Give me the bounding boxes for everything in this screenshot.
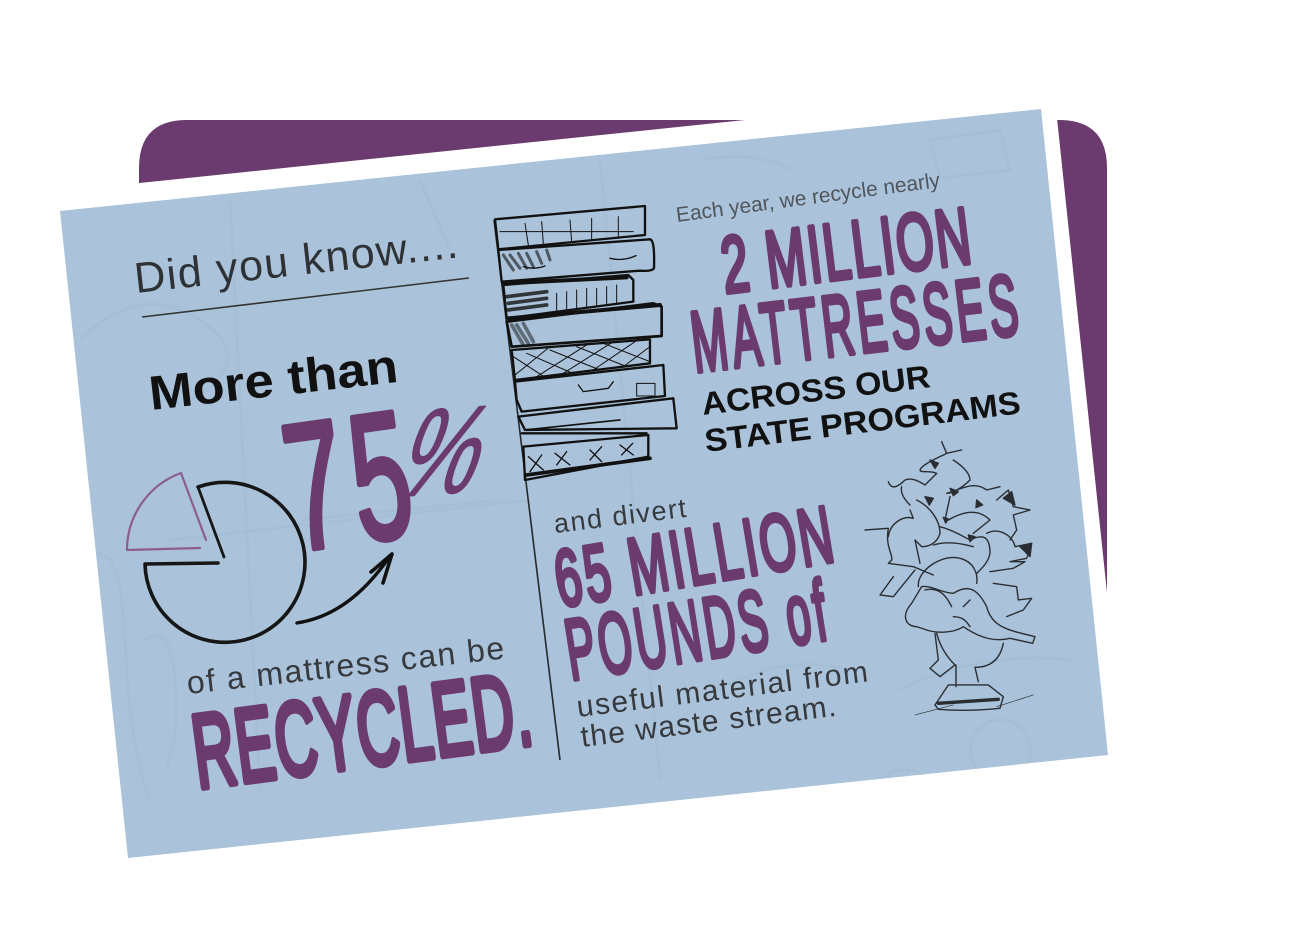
stat: 75 percent: 75 [273,374,423,590]
text: of a mattress can be: of a mattress can be [185,630,506,701]
text: useful material [575,655,870,754]
text: useful material: the waste stream. [579,690,838,754]
stat: 75 percent [273,374,511,590]
heading: Did you know: Did you know.... [132,220,460,303]
arrow [297,554,392,623]
stat: 65 million pounds: POUNDS of [559,563,833,699]
stat: 2 million mattresses [686,190,1023,391]
text: and divert: and divert [552,493,688,539]
stat: 2 million mattresses: 2 MILLION [716,190,975,310]
icon: elephants balancing on a scale [865,442,1035,715]
stat: 65 million pounds: 65 MILLION [548,490,839,624]
white paper gap [130,118,1125,880]
text: Each year: Each year, we recycle nearly [675,169,942,227]
divider [494,220,560,760]
text: across our state programs: ACROSS OUR [699,358,932,422]
text: across our state programs [699,358,1022,459]
icon: pie chart with removed slice [127,473,305,642]
stat: 2 million mattresses: MATTRESSES [686,257,1023,391]
text: More than: More than [146,340,401,421]
panel: blue card [60,109,1108,858]
text: RECYCLED: RECYCLED. [186,650,538,810]
stat: 75 percent: % [382,378,511,524]
infographic [60,109,1108,858]
purple back card [139,120,1107,640]
icon: stack of mattresses [495,206,677,480]
stat: 65 million pounds [548,490,839,699]
text: across our state programs: STATE PROGRAMS [702,384,1022,459]
text: useful material: useful material from [575,655,870,724]
